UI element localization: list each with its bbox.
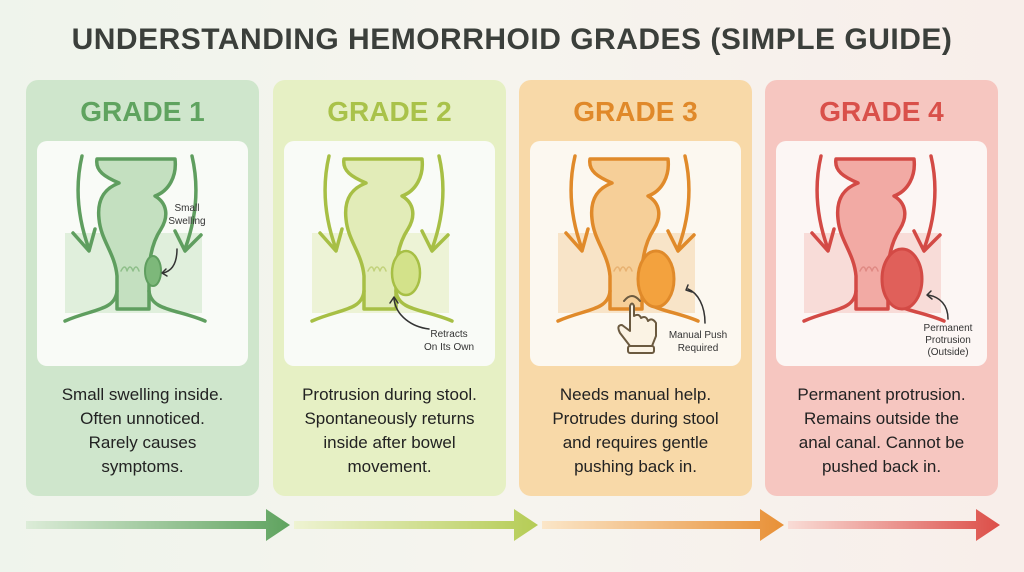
description: grade 4: pushed back in. [822, 457, 941, 476]
illustration: grade 1: Small [174, 203, 200, 214]
illustration: grade 2 [284, 141, 495, 366]
illustration: grade 4: Protrusion [925, 335, 971, 346]
illustration: grade 1 [37, 141, 248, 366]
description: grade 2: movement. [347, 457, 432, 476]
description: grade 3: and requires gentle [563, 433, 708, 452]
description: grade 4: anal canal. Cannot be [799, 433, 964, 452]
panel: grade 1 [26, 80, 259, 496]
heading: grade 1: GRADE 1 [80, 96, 205, 127]
heading: grade 2: GRADE 2 [327, 96, 452, 127]
description: grade 1: symptoms. [101, 457, 184, 476]
description: grade 2: Protrusion during stool. [302, 385, 477, 404]
description: grade 1 [62, 385, 223, 476]
description: grade 3 [552, 385, 719, 476]
description: grade 2: inside after bowel [323, 433, 456, 452]
description: grade 1: Often unnoticed. [80, 409, 205, 428]
description: grade 4: Remains outside the [804, 409, 959, 428]
panel: grade 4 [765, 80, 998, 496]
icon: hand [618, 296, 656, 353]
description: grade 2 [302, 385, 477, 476]
description: grade 4 [797, 385, 966, 476]
description: grade 1: Small swelling inside. [62, 385, 223, 404]
illustration: grade 2: Retracts [430, 329, 468, 340]
panel: grade 3 [519, 80, 752, 496]
heading: grade 3: GRADE 3 [573, 96, 698, 127]
description: grade 1: Rarely causes [89, 433, 196, 452]
description: grade 3: Protrudes during stool [552, 409, 719, 428]
arrow: progression bar [26, 509, 1000, 541]
description: grade 3: pushing back in. [574, 457, 697, 476]
illustration: grade 4: Permanent [924, 323, 973, 334]
illustration: grade 3: Required [678, 343, 718, 354]
illustration: grade 3 [530, 141, 741, 366]
illustration: grade 3: Manual Push [669, 330, 727, 341]
heading: grade 4: GRADE 4 [819, 96, 944, 127]
illustration: grade 1: Swelling [168, 216, 206, 227]
description: grade 4: Permanent protrusion. [797, 385, 966, 404]
description: grade 3: Needs manual help. [560, 385, 711, 404]
title: UNDERSTANDING HEMORRHOID GRADES (SIMPLE GUIDE) [72, 23, 952, 56]
panel: grade 2 [273, 80, 506, 496]
illustration: grade 4 [776, 141, 987, 366]
illustration: grade 2: On Its Own [424, 342, 474, 353]
description: grade 2: Spontaneously returns [304, 409, 475, 428]
illustration: grade 4: (Outside) [927, 347, 969, 358]
